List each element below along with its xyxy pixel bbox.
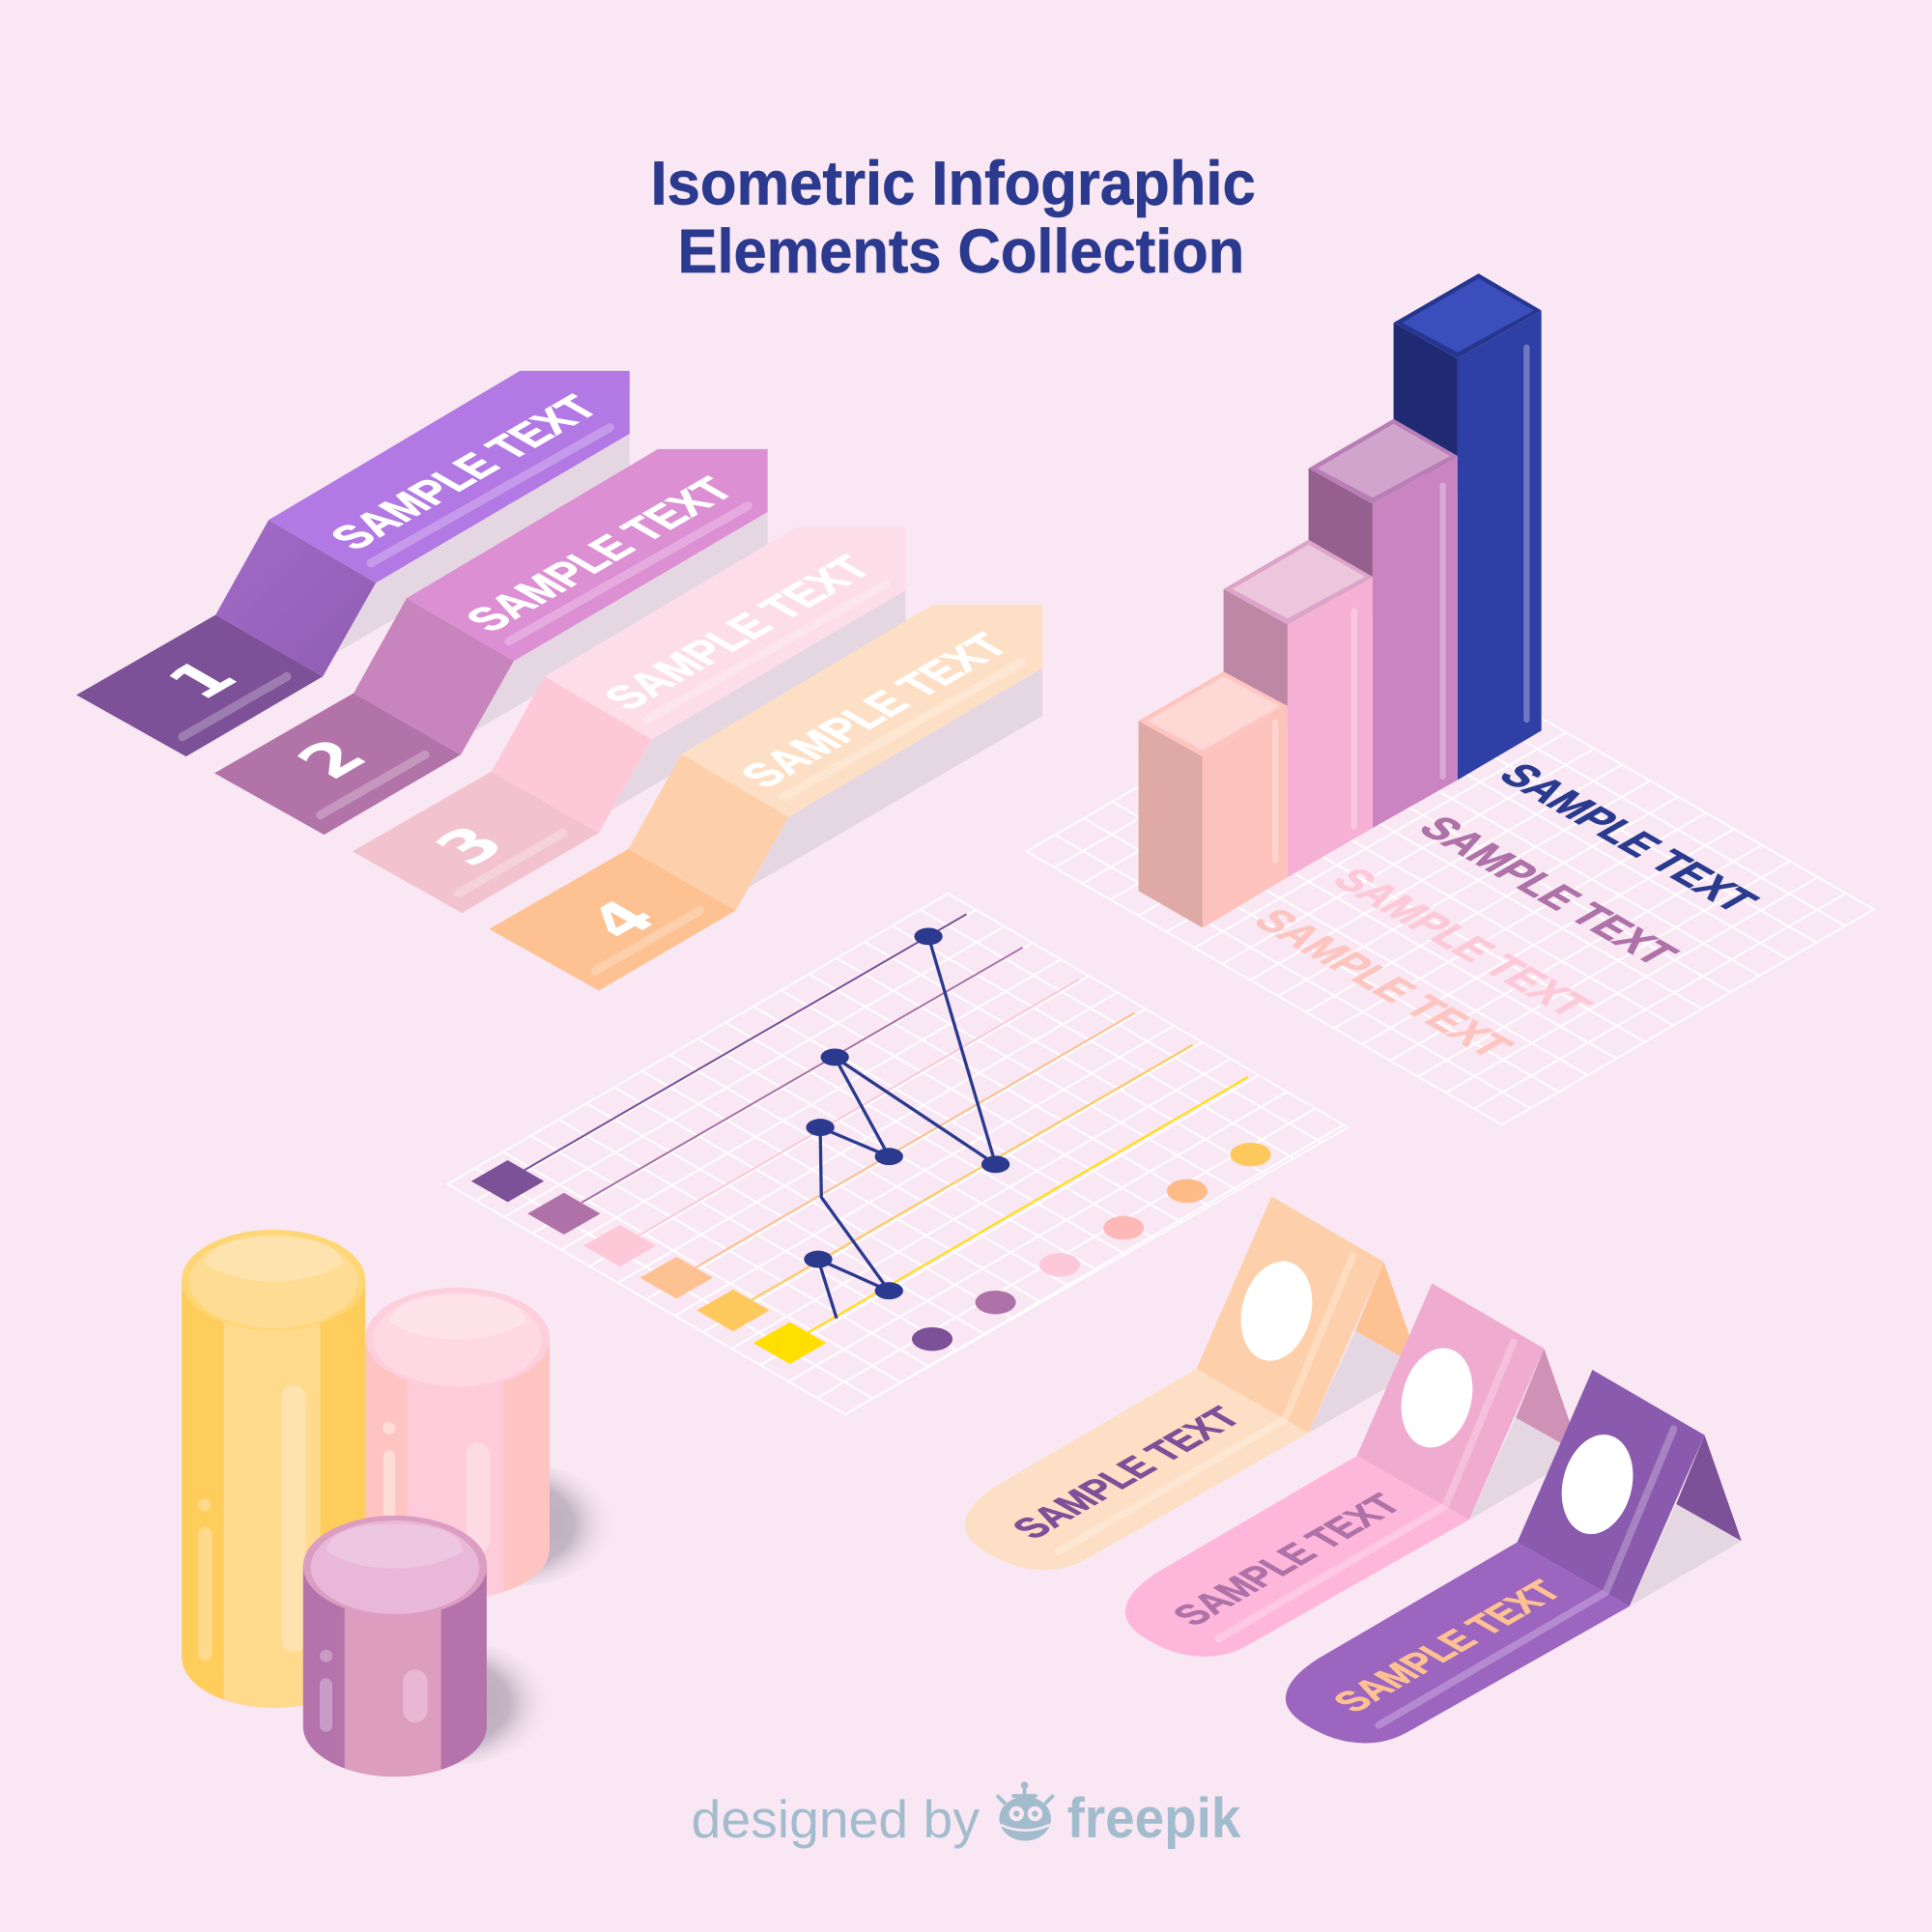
footer credit: designed by <box>692 1789 980 1849</box>
cylinder: yellow <box>182 1230 365 1712</box>
folded card 2: SAMPLE TEXT <box>1162 1488 1411 1632</box>
title <box>650 149 1256 286</box>
title: Isometric Infographic <box>650 149 1256 218</box>
arrow banner 3 <box>353 527 906 913</box>
arrow banner 2 <box>214 449 768 835</box>
footer credit: freepik <box>1067 1787 1241 1850</box>
cylinder: pink <box>365 1288 550 1609</box>
arrow banner 1: 1 <box>150 649 254 709</box>
series end dots <box>912 1143 1271 1350</box>
floor legend labels <box>1243 756 1769 1064</box>
arrow banner 3: SAMPLE TEXT <box>593 549 884 717</box>
folded card 2 <box>1125 1283 1581 1657</box>
cylinder: purple <box>303 1516 487 1788</box>
bar: blue <box>1394 273 1542 780</box>
cylinder shadows <box>357 1463 613 1765</box>
series lines <box>524 914 1248 1333</box>
bar: peach <box>1139 671 1288 927</box>
arrow banner 2: 2 <box>280 729 384 789</box>
folded card 1 <box>965 1197 1421 1570</box>
footer credit <box>692 1781 1241 1850</box>
chart grid <box>447 894 1348 1414</box>
arrow banner 1 <box>76 371 630 756</box>
line chart <box>447 894 1348 1414</box>
title: Elements Collection <box>678 216 1244 286</box>
blue data path <box>804 927 1009 1319</box>
floor grid under bar chart <box>1026 636 1874 1125</box>
floor legend labels: SAMPLE TEXT <box>1489 756 1769 919</box>
arrow banner 4: 4 <box>570 890 674 950</box>
arrow banner 1: SAMPLE TEXT <box>320 388 611 556</box>
arrow banner 3: 3 <box>418 816 522 876</box>
floor legend labels: SAMPLE TEXT <box>1408 810 1689 972</box>
folded card 3 <box>1286 1370 1742 1743</box>
icon: freepik mascot <box>997 1781 1054 1841</box>
bar chart <box>1139 273 1542 927</box>
folded card 1: SAMPLE TEXT <box>1002 1401 1251 1545</box>
arrow banner 4 <box>489 605 1042 991</box>
floor legend labels: SAMPLE TEXT <box>1243 902 1523 1064</box>
series squares <box>471 1160 826 1364</box>
bar: mauve <box>1309 419 1458 828</box>
bar: pink <box>1224 540 1373 877</box>
folded card 3: SAMPLE TEXT <box>1323 1575 1572 1718</box>
arrow banner 4: SAMPLE TEXT <box>729 627 1020 794</box>
arrow banner 2: SAMPLE TEXT <box>455 470 746 639</box>
floor legend labels: SAMPLE TEXT <box>1322 862 1603 1023</box>
